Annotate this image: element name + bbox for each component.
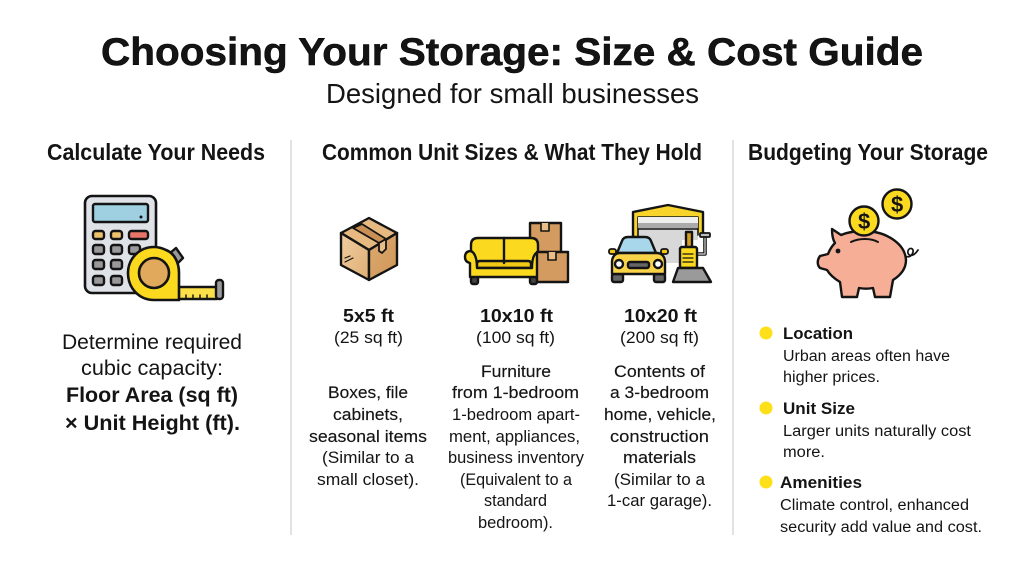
title: Choosing Your Storage: Size & Cost Guide [101,31,923,74]
item: unit size: more. [783,444,825,461]
column: 10x10 unit: business inventory [448,448,584,467]
column: 10x10 unit: 10x10 ft [480,306,553,326]
icon: garage, car and equipment [609,205,711,282]
column: 10x10 unit: Furniture [481,362,551,381]
column: 10x10 unit: from 1-bedroom [452,383,579,402]
heading: budgeting your storage: Budgeting Your Storage [748,139,988,165]
column: 10x20 unit: 10x20 ft [624,306,697,326]
heading: common unit sizes: Common Unit Sizes & What They Hold [322,139,702,165]
item: unit size: Unit Size [783,399,855,418]
column: 10x10 unit: bedroom). [478,513,553,532]
formula text: Determine required [62,331,242,354]
item: amenities: Amenities [780,473,862,492]
item: location: higher prices. [783,369,880,386]
column: 10x10 unit: (100 sq ft) [476,328,555,347]
item: amenities [760,473,982,536]
column: 10x20 unit: materials [623,448,696,467]
icon: piggy bank with coins [818,190,918,297]
column: 5x5 unit: (Similar to a [322,448,415,467]
column: 10x10 unit: (Equivalent to a [460,470,573,489]
item: amenities: Climate control, enhanced [780,497,969,514]
column: 10x20 unit: (Similar to a [614,470,706,489]
column: 10x20 unit: a 3-bedroom [610,383,709,402]
column: 5x5 unit: small closet). [317,470,419,489]
column: 10x10 unit: 1-bedroom apart- [452,405,580,424]
item: location: Urban areas often have [783,348,950,365]
column: 5x5 unit: Boxes, file [328,383,408,402]
column: 10x20 unit: construction [610,427,709,446]
column: 5x5 unit: seasonal items [309,427,427,446]
column: 10x20 unit: 1-car garage). [607,491,712,510]
subtitle: Designed for small businesses [326,78,699,109]
column: 10x20 unit: Contents of [614,362,705,381]
column: 10x10 unit [448,306,584,532]
heading: calculate your needs: Calculate Your Needs [47,139,265,165]
column: 10x20 unit: (200 sq ft) [620,328,699,347]
panel: calculate your needs [47,139,265,435]
item: unit size: Larger units naturally cost [783,423,972,440]
column: 5x5 unit: cabinets, [333,405,403,424]
item: unit size [760,399,972,461]
icon: piggy bank with coins: $ [891,192,903,217]
column: 10x10 unit: ment, appliances, [449,427,580,446]
column: 10x10 unit: standard [484,491,547,510]
formula text: cubic capacity: [81,357,223,380]
icon: sofa and boxes [465,223,568,284]
icon: piggy bank with coins: $ [858,209,870,234]
panel: budgeting your storage [748,139,988,536]
column: 10x20 unit [604,306,716,510]
formula text: × Unit Height (ft). [65,412,240,435]
icon: cardboard box [341,218,397,280]
item: location: Location [783,324,853,343]
column: 10x20 unit: home, vehicle, [604,405,716,424]
column: 5x5 unit [309,306,427,489]
column: 5x5 unit: 5x5 ft [343,306,394,326]
item: amenities: security add value and cost. [780,519,982,536]
panel: common unit sizes [309,139,716,532]
formula text: Floor Area (sq ft) [66,384,238,407]
item: location [760,324,950,386]
icon: calculator and tape measure [85,196,223,300]
column: 5x5 unit: (25 sq ft) [334,328,403,347]
formula text [62,331,242,435]
